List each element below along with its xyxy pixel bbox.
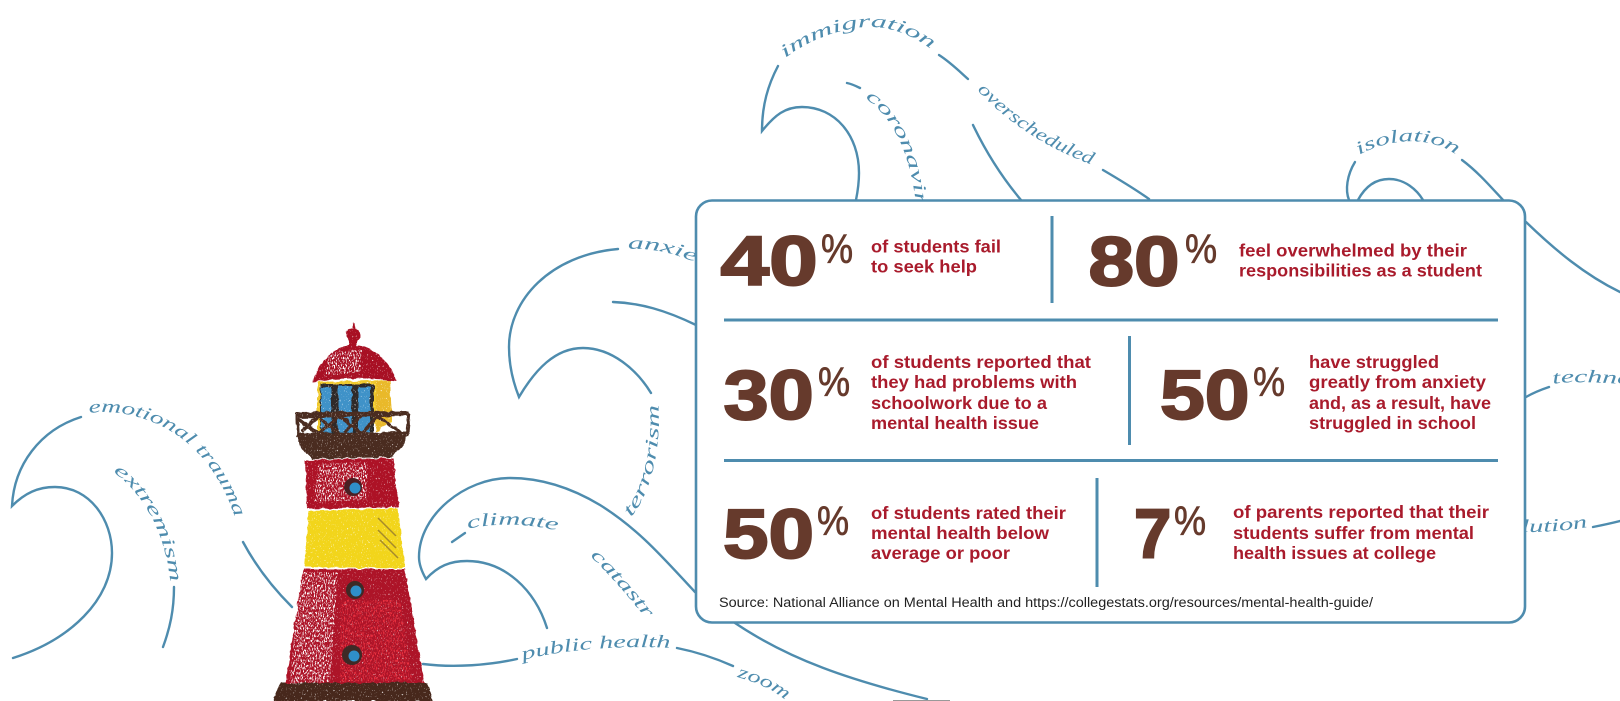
stat: 80%: % [1185, 227, 1217, 273]
stat: 40%: % [821, 227, 853, 273]
stat: 7%: of parents reported that their [1233, 502, 1489, 522]
stat: 50% anxiety: greatly from anxiety [1309, 372, 1486, 392]
source note: Source: National Alliance on Mental Health and https://collegestats.org/resources/mental-health-guide/ [719, 595, 1373, 610]
stat: 80%: responsibilities as a student [1239, 261, 1482, 281]
wave: isolation, technology, pollution: isolation [1357, 130, 1458, 154]
wave: anxiety and terrorism: terrorism [626, 406, 659, 516]
stat: 7%: % [1174, 499, 1206, 545]
wave: climate, catastrophe, public health, zoom: public health [522, 634, 669, 664]
stat: 50% anxiety [1160, 352, 1491, 434]
wave: emotional trauma and extremism: extremism [115, 468, 178, 581]
wave: immigration, coronavirus, overscheduled [760, 18, 1150, 200]
stat: 80%: feel overwhelmed by their [1239, 241, 1467, 261]
wave: anxiety and terrorism [508, 240, 695, 516]
stat: 7%: students suffer from mental [1233, 523, 1474, 543]
stat: 50% rated poor [723, 496, 1066, 574]
stat: 7% [1134, 494, 1489, 573]
stat: 50% rated poor: of students rated their [871, 503, 1066, 523]
stat: 50% anxiety: 50 [1160, 356, 1250, 434]
stat: 50% anxiety: have struggled [1309, 352, 1439, 372]
stat: 50% anxiety: and, as a result, have [1309, 393, 1491, 413]
stat: 50% rated poor: % [817, 499, 849, 545]
wave: climate, catastrophe, public health, zoom: catastr [592, 553, 653, 614]
stat: 40%: 40 [720, 221, 818, 300]
stat: 40% [720, 221, 1001, 300]
stat: 30% [724, 352, 1091, 435]
stat: 50% anxiety: struggled in school [1309, 413, 1476, 433]
stat: 30%: % [818, 360, 850, 406]
stat: 80% [1088, 223, 1482, 301]
wave: climate, catastrophe, public health, zoom: climate [468, 513, 558, 530]
wave: emotional trauma and extremism [10, 404, 294, 660]
stat: 50% rated poor: 50 [723, 496, 814, 574]
stat: 7%: 7 [1134, 494, 1171, 573]
wave: emotional trauma and extremism: emotional trauma [90, 404, 243, 516]
stat: 30%: schoolwork due to a [871, 393, 1047, 413]
stat: 80%: 80 [1088, 223, 1180, 301]
wave: immigration, coronavirus, overscheduled: overscheduled [978, 86, 1096, 164]
wave: immigration, coronavirus, overscheduled: immigration [782, 18, 934, 57]
stat: 40%: of students fail [871, 237, 1001, 257]
stat: 30%: of students reported that [871, 352, 1091, 372]
wave: climate, catastrophe, public health, zoom [418, 476, 950, 701]
lighthouse illustration [273, 322, 433, 701]
stat: 30%: mental health issue [871, 413, 1039, 433]
wave: isolation, technology, pollution: pollution [1526, 519, 1586, 532]
stat: 7%: health issues at college [1233, 543, 1436, 563]
stat: 30%: they had problems with [871, 372, 1077, 392]
stat: 50% rated poor: average or poor [871, 543, 1010, 563]
wave: isolation, technology, pollution [1346, 130, 1620, 532]
stat: 50% rated poor: mental health below [871, 523, 1049, 543]
panel: statistics card [696, 200, 1525, 622]
stat: 30%: 30 [724, 356, 814, 435]
wave: climate, catastrophe, public health, zoom: zoom [736, 670, 789, 700]
stat: 40%: to seek help [871, 257, 977, 277]
stat: 50% anxiety: % [1253, 360, 1285, 406]
